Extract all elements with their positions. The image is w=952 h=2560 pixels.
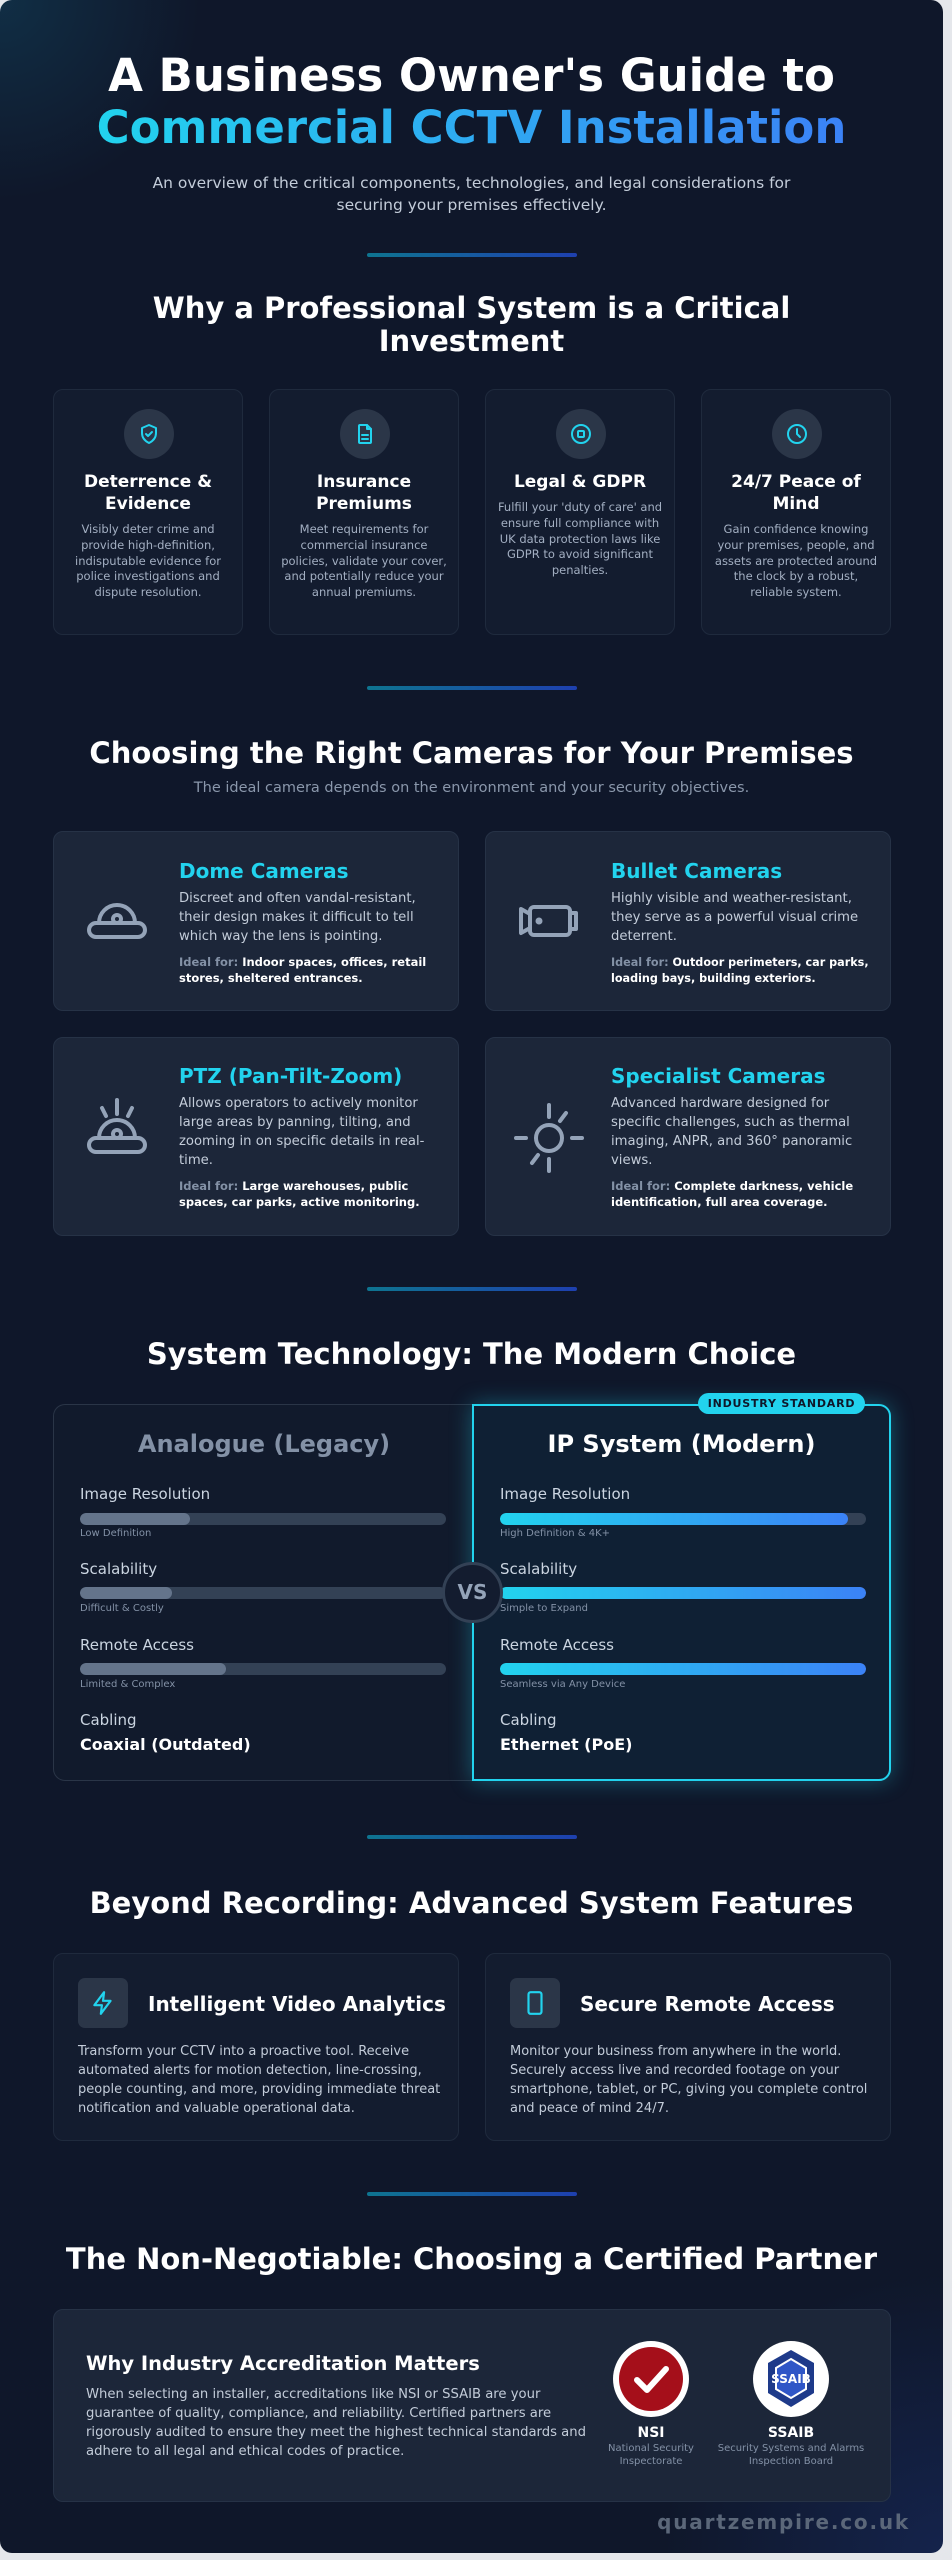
- heading: advanced features: Beyond Recording: Advanced System Features: [90, 1886, 853, 1920]
- subtitle: cameras: The ideal camera depends on the environment and your security objectives.: [194, 780, 749, 796]
- panel: legal: Fulfill your 'duty of care' and ensure full compliance with UK data protection laws like GDPR to avoid significant penalties.: [498, 500, 662, 577]
- panel: deterrence: Deterrence &: [84, 472, 212, 492]
- icon: NSI badge: National Security: [608, 2443, 694, 2454]
- panel: ip system: Seamless via Any Device: [500, 1679, 625, 1690]
- panel: specialist: Specialist Cameras: [611, 1064, 825, 1088]
- panel: deterrence: [53, 389, 243, 635]
- heading: system technology: System Technology: The Modern Choice: [147, 1337, 796, 1371]
- icon: specialist: [514, 1103, 584, 1173]
- panel: peace of mind: Gain confidence knowing your premises, people, and assets are protected around the clock by a robust, reliable system.: [715, 522, 877, 599]
- icon: dome: [87, 903, 147, 939]
- icon: NSI badge: Inspectorate: [620, 2456, 682, 2467]
- panel: ip system: Simple to Expand: [500, 1603, 588, 1614]
- panel: ip system: Cabling: [500, 1711, 557, 1729]
- panel: bullet: [485, 831, 891, 1011]
- icon: target: [556, 409, 606, 459]
- comparison panel: [53, 1392, 903, 1793]
- panel: analogue: Low Definition: [80, 1528, 151, 1539]
- title: Commercial CCTV Installation: [97, 101, 846, 154]
- panel: analogue: Coaxial (Outdated): [80, 1735, 251, 1754]
- icon: SSAIB badge: SSAIB: [768, 2425, 814, 2441]
- icon: ptz: [87, 1098, 147, 1154]
- icon: shield: [124, 409, 174, 459]
- panel: video analytics: Transform your CCTV into a proactive tool. Receive automated alerts for motion detection, line-crossing, people counting, and more, providing immediate threat notification and valuable operational data.: [78, 2044, 440, 2116]
- badge: industry standard: INDUSTRY STANDARD: [708, 1397, 855, 1410]
- heading: cameras: Choosing the Right Cameras for Your Premises: [89, 736, 854, 770]
- panel: dome: [53, 831, 459, 1011]
- panel: ip system: IP System (Modern): [548, 1430, 815, 1458]
- icon: phone: [510, 1978, 560, 2028]
- icon: lightning: [78, 1978, 128, 2028]
- panel: remote access: Secure Remote Access: [580, 1992, 835, 2016]
- icon: SSAIB badge: Security Systems and Alarms: [718, 2443, 864, 2454]
- panel: deterrence: Visibly deter crime and provide high-definition, indisputable evidence for police investigations and dispute resolution.: [75, 522, 221, 599]
- panel: analogue: Image Resolution: [80, 1485, 210, 1503]
- panel: ip system: Image Resolution: [500, 1485, 630, 1503]
- panel: ptz: [53, 1037, 459, 1236]
- icon: NSI badge: NSI: [637, 2425, 664, 2441]
- title: A Business Owner's Guide to: [108, 49, 835, 102]
- icon: document: [340, 409, 390, 459]
- panel: specialist: Advanced hardware designed for specific challenges, such as thermal imaging, ANPR, and 360° panoramic views.: [611, 1096, 852, 1168]
- panel: peace of mind: Mind: [772, 494, 820, 514]
- panel: insurance: Meet requirements for commercial insurance policies, validate your cover, and potentially reduce your annual premiums.: [281, 522, 447, 599]
- panel: accreditation: When selecting an installer, accreditations like NSI or SSAIB are your guarantee of quality, compliance, and reliability. Certified partners are rigorously audited to ensure they meet the highest technical standards and adhere to all legal and ethical codes of practice.: [86, 2387, 586, 2459]
- panel: dome: Discreet and often vandal-resistant, their design makes it difficult to tell which way the lens is pointing.: [179, 891, 416, 944]
- icon: NSI badge: [608, 2341, 694, 2467]
- icon: SSAIB badge: [718, 2341, 864, 2467]
- panel: accreditation: [53, 2309, 891, 2502]
- panel: dome: Ideal for: Indoor spaces, offices, retail stores, sheltered entrances.: [179, 955, 426, 984]
- panel: analogue: Cabling: [80, 1711, 137, 1729]
- panel: remote access: Monitor your business from anywhere in the world. Securely access live and recorded footage on your smartphone, tablet, or PC, giving you complete control and peace of mind 24/7.: [510, 2044, 867, 2116]
- panel: deterrence: Evidence: [105, 494, 191, 514]
- footer: brand: quartzempire.co.uk: [657, 2510, 910, 2534]
- subtitle: An overview of the critical components, technologies, and legal considerations for securing your premises effectively.: [153, 174, 790, 214]
- panel: analogue: Scalability: [80, 1560, 157, 1578]
- panel: ip system: High Definition & 4K+: [500, 1528, 610, 1539]
- title: [97, 49, 846, 154]
- icon: bullet camera: [519, 905, 578, 937]
- heading: why professional: Why a Professional System is a Critical: [153, 291, 790, 325]
- panel: insurance: [269, 389, 459, 635]
- panel: peace of mind: [701, 389, 891, 635]
- heading: why professional: Investment: [379, 324, 564, 358]
- panel: ptz: PTZ (Pan-Tilt-Zoom): [179, 1064, 402, 1088]
- icon: vs: VS: [458, 1580, 487, 1604]
- badge: industry standard: [698, 1393, 865, 1414]
- panel: ip system: Ethernet (PoE): [500, 1735, 632, 1754]
- panel: specialist: [485, 1037, 891, 1236]
- icon: vs: [442, 1562, 503, 1623]
- panel: insurance: Premiums: [316, 494, 412, 514]
- panel: ptz: Ideal for: Large warehouses, public spaces, car parks, active monitoring.: [179, 1179, 420, 1208]
- heading: why professional: [153, 291, 790, 358]
- panel: ip system: Scalability: [500, 1560, 577, 1578]
- panel: specialist: Ideal for: Complete darkness, vehicle identification, full area coverage.: [611, 1179, 853, 1208]
- panel: video analytics: [53, 1953, 459, 2141]
- panel: analogue: Limited & Complex: [80, 1679, 175, 1690]
- panel: dome: Dome Cameras: [179, 859, 349, 883]
- panel: video analytics: Intelligent Video Analytics: [148, 1992, 446, 2016]
- panel: insurance: Insurance: [317, 472, 411, 492]
- panel: bullet: Highly visible and weather-resistant, they serve as a powerful visual crime deterrent.: [611, 891, 858, 944]
- panel: bullet: Ideal for: Outdoor perimeters, car parks, loading bays, building exteriors.: [611, 956, 869, 984]
- panel: bullet: Bullet Cameras: [611, 859, 782, 883]
- panel: analogue: Analogue (Legacy): [138, 1430, 390, 1458]
- panel: ip system: Remote Access: [500, 1636, 614, 1654]
- panel: ptz: Allows operators to actively monitor large areas by panning, tilting, and zooming in on specific details in real-time.: [179, 1096, 424, 1168]
- panel: accreditation: Why Industry Accreditation Matters: [86, 2352, 480, 2375]
- panel: legal: Legal & GDPR: [514, 472, 646, 492]
- icon: clock: [772, 409, 822, 459]
- heading: certified partner: The Non-Negotiable: Choosing a Certified Partner: [66, 2242, 877, 2276]
- panel: remote access: [485, 1953, 891, 2141]
- panel: analogue: [53, 1404, 473, 1781]
- panel: analogue: Difficult & Costly: [80, 1603, 164, 1614]
- panel: peace of mind: 24/7 Peace of: [731, 472, 861, 492]
- icon: SSAIB badge: Inspection Board: [749, 2456, 833, 2467]
- icon: SSAIB badge: SSAIB: [771, 2372, 811, 2386]
- panel: ip system: [472, 1404, 891, 1781]
- panel: analogue: Remote Access: [80, 1636, 194, 1654]
- panel: legal: [485, 389, 675, 635]
